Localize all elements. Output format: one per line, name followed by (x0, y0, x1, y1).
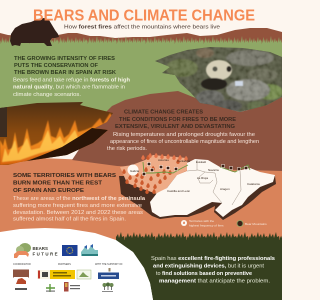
small labels: PARTNERS (58, 263, 71, 266)
region borders (187, 160, 241, 205)
photo: forest fire (0, 100, 115, 166)
dark grass strip (116, 232, 282, 241)
logo: trees (102, 282, 114, 292)
body: section 3: suffered almost half of all the fires in Spain. (13, 216, 126, 222)
map labels: Catalonia (247, 182, 260, 186)
map labels: Castilla and León (167, 189, 191, 193)
map labels: Aragon (220, 187, 230, 191)
photo: brown bear on rocks (155, 47, 282, 112)
legend: fire frequency: Territories with the (189, 219, 214, 223)
body: section 3: These are areas of the northwest of the peninsula (13, 196, 145, 202)
heading: section 1: THE BROWN BEAR IN SPAIN AT RISK (14, 70, 116, 76)
small labels (13, 263, 123, 266)
heading: section 1 (14, 56, 116, 76)
body: section 2 (107, 132, 259, 152)
panel: brown section (72, 91, 282, 171)
heading: section 2: CLIMATE CHANGE CREATES (124, 110, 204, 116)
bear icons (142, 162, 248, 176)
panel: dark green conclusion (112, 240, 282, 300)
grass strip (0, 36, 282, 45)
heading: section 3: OF SPAIN AND EUROPE (13, 188, 84, 194)
heading: section 1: PUTS THE CONSERVATION OF (14, 63, 98, 69)
Galicia white circle (128, 164, 138, 176)
logo: EU flag (62, 245, 78, 256)
flames on territories (122, 155, 180, 194)
flames above coast (141, 153, 188, 161)
conclusion text: management that anticipate the problem. (159, 278, 270, 284)
legend: fire frequency: highest frequency of fires (189, 224, 224, 228)
small labels: WITH THE SUPPORT OF (95, 263, 123, 266)
legend: bear mountains: Bear Mountains (245, 222, 267, 226)
heading: section 1: THE GROWING INTENSITY OF FIRES (14, 56, 116, 62)
body: section 3: devastation. Between 2012 and 2022 these areas (13, 210, 143, 216)
logo: Bears with Future: BEARS (32, 246, 48, 251)
map labels: Navarra (208, 168, 219, 172)
body: section 3: suffering more frequent fires and more extensive (13, 203, 142, 209)
bear in photo (201, 60, 243, 90)
subtitle: How forest fires affect the mountains where bears live (64, 24, 220, 30)
conclusion text: and extinguishing devices, but it is urgent (153, 264, 265, 270)
territories with most fires (120, 155, 188, 194)
map labels: Asturias (158, 158, 169, 162)
burnt ground (26, 128, 108, 162)
body: section 2: the risk periods. (107, 146, 147, 152)
body: section 1: natural quality , but which are flammable in (13, 84, 125, 90)
map labels: Galicia (130, 169, 140, 173)
panel: green section (0, 44, 282, 125)
conclusion text: to find solutions based on preventive (156, 271, 252, 277)
title: BEARS AND CLIMATE CHANGE (33, 8, 255, 25)
legend: fire frequency (181, 219, 224, 228)
map labels (130, 158, 260, 193)
logo: partner green (77, 270, 91, 279)
heading: section 3: BURN MORE THAN THE REST (13, 180, 103, 186)
flames (0, 113, 112, 165)
logo: Bears with Future: FUTURE (32, 252, 58, 256)
body: section 2: Rising temperatures and prolonged droughts favour the (113, 132, 255, 138)
panel: orange section (0, 158, 282, 246)
section 1 text (13, 56, 130, 98)
logo: Castilla y León (64, 282, 80, 292)
map labels: La Rioja (197, 176, 208, 180)
small labels: COORDINATOR (13, 263, 31, 266)
mountain ridge (0, 28, 282, 46)
map labels: Euskadi (196, 160, 206, 164)
logo: partner waves (81, 244, 98, 256)
body: section 1: climate change scenarios. (13, 92, 81, 98)
conclusion text (151, 256, 275, 284)
map shadow (119, 176, 276, 220)
logo: small green emblem (46, 284, 55, 292)
legend: bear mountains (237, 220, 267, 226)
body: section 1: Bears feed and take refuge in forests of high (13, 78, 130, 84)
logo: coordinator (13, 270, 29, 290)
panel: white partners area (0, 228, 153, 300)
section 3 text (13, 173, 145, 222)
bear mountains outline (143, 162, 250, 173)
conclusion text: Spain has excellent fire-fighting professionals (151, 256, 275, 262)
heading: section 2 (115, 110, 237, 130)
heading: section 3 (13, 173, 116, 194)
body: section 3 (13, 196, 145, 222)
white map landmass (150, 159, 275, 217)
map of northern Spain (119, 153, 276, 220)
photo texture (156, 47, 282, 112)
heading: section 3: SOME TERRITORIES WITH BEARS (13, 173, 116, 179)
icon: bear silhouette (10, 18, 59, 46)
body: section 1 (13, 78, 130, 98)
section 2 text (107, 110, 259, 152)
heading: section 2: EXTENSIVE, VIRULENT AND DEVASTATING (115, 124, 235, 130)
logo: Spanish ministry (37, 270, 75, 279)
map labels: Cantabria (177, 159, 190, 163)
logo: support blue (98, 268, 119, 279)
logo: Bears with Future (14, 243, 58, 258)
heading: section 2: THE CONDITIONS FOR FIRES TO BE MORE (119, 117, 237, 123)
body: section 2: appearance of fires of uncontrollable magnitude and lengthen (110, 139, 259, 145)
